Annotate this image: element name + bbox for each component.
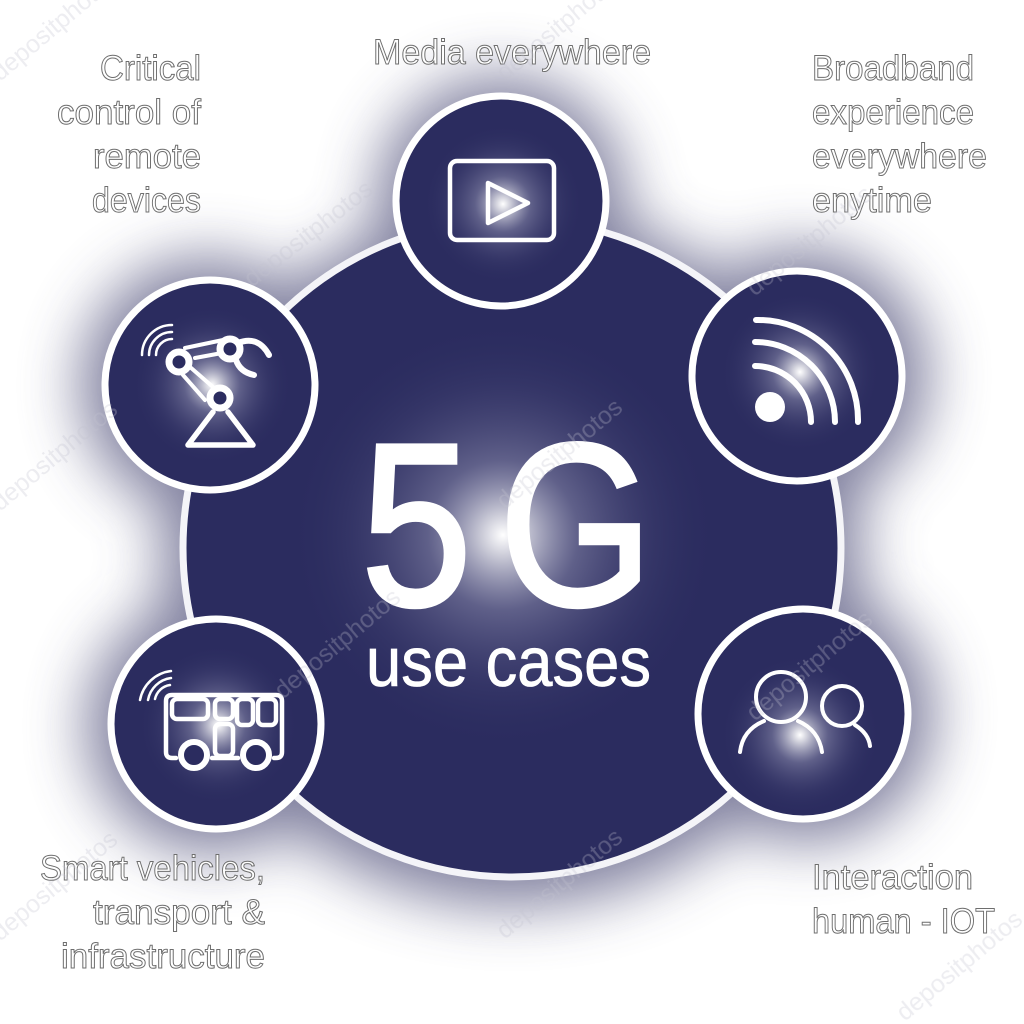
title: 5G: G xyxy=(499,396,653,655)
label: critical control: devices xyxy=(92,181,201,220)
label: critical control xyxy=(57,49,201,220)
title: 5G: 5 xyxy=(361,396,472,655)
label: critical control: remote xyxy=(93,137,201,176)
label: interaction: human - IOT xyxy=(812,902,995,941)
watermark text: depositphotos xyxy=(269,583,406,705)
icon: robot arm xyxy=(142,325,269,445)
label: interaction xyxy=(812,858,995,941)
label: vehicles xyxy=(40,849,265,976)
label: interaction: Interaction xyxy=(812,858,973,897)
watermark text: depositphotos xyxy=(491,393,628,515)
icon: people xyxy=(740,672,870,752)
watermark text: depositphotos xyxy=(491,823,628,945)
panel: central circle xyxy=(183,219,841,877)
icon: play screen xyxy=(450,161,554,240)
label: media: Media everywhere xyxy=(373,33,651,72)
label: broadband: enytime xyxy=(812,181,932,220)
title: 5G xyxy=(361,396,653,655)
panel: interaction circle xyxy=(698,609,908,819)
label: broadband: Broadband xyxy=(812,49,974,88)
icon: wifi signal xyxy=(755,320,858,422)
panel: broadband circle xyxy=(692,271,902,481)
panel: vehicles circle xyxy=(111,619,321,829)
label: broadband xyxy=(812,49,987,220)
label: vehicles: infrastructure xyxy=(61,937,265,976)
label: critical control: control of xyxy=(57,93,201,132)
panel: media circle xyxy=(396,96,606,306)
watermark text: depositphotos xyxy=(741,605,878,727)
watermark text: depositphotos xyxy=(741,180,878,302)
watermark text: depositphotos xyxy=(238,175,378,293)
panel: critical control circle xyxy=(105,280,315,490)
subtitle: use cases: use cases xyxy=(366,623,651,701)
label: broadband: everywhere xyxy=(812,137,987,176)
label: vehicles: transport & xyxy=(93,893,265,932)
label: broadband: experience xyxy=(812,93,974,132)
label: vehicles: Smart vehicles, xyxy=(40,849,265,888)
halo shadow xyxy=(80,76,934,906)
icon: bus xyxy=(140,671,282,768)
label: critical control: Critical xyxy=(100,49,201,88)
